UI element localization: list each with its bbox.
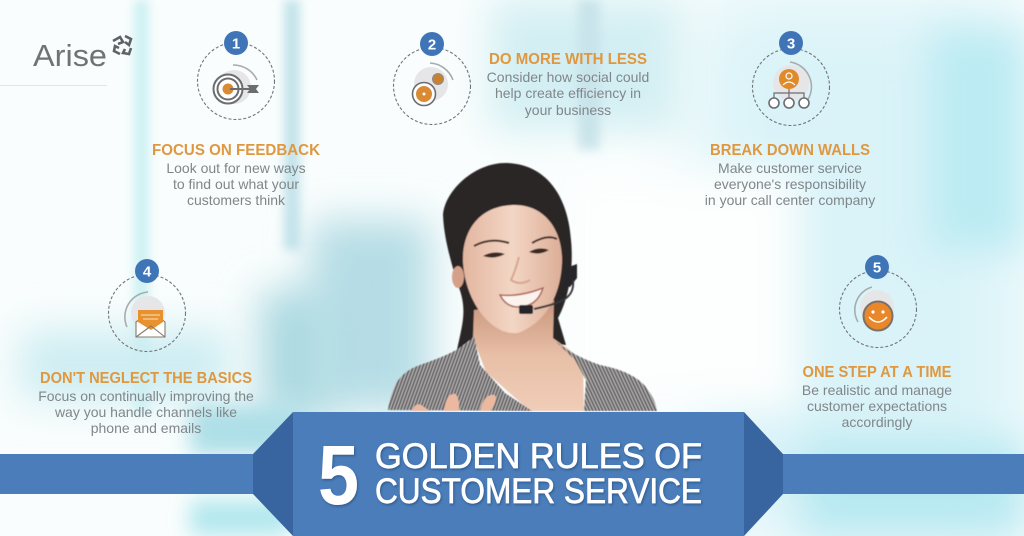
number badge 5	[865, 255, 889, 279]
number badge 1: 1	[232, 36, 240, 52]
icon: open envelope	[108, 274, 186, 352]
rule 2: do more with less	[394, 32, 649, 124]
body text: to find out what your	[173, 176, 299, 192]
number badge 3: 3	[787, 36, 795, 52]
title text: CUSTOMER SERVICE	[375, 472, 702, 511]
eyes	[483, 248, 549, 258]
number badge 5: 5	[873, 260, 881, 276]
body text: accordingly	[842, 414, 912, 430]
body text: way you handle channels like	[54, 404, 237, 420]
title text	[375, 437, 702, 511]
number badge 1	[224, 31, 248, 55]
rule 4: don't neglect the basics	[38, 259, 254, 436]
photo: woman with headset	[388, 163, 657, 411]
body text: customer expectations	[807, 398, 947, 414]
rule 1: focus on feedback	[152, 31, 321, 208]
number badge 2: 2	[428, 36, 436, 54]
icon: org chart	[752, 48, 830, 126]
rule 5: one step at a time	[802, 255, 952, 430]
ear	[452, 266, 464, 288]
body text: everyone's responsibility	[714, 176, 866, 192]
heading: BREAK DOWN WALLS	[710, 142, 870, 159]
shirt left	[388, 336, 532, 411]
smile	[500, 288, 543, 307]
heading: ONE STEP AT A TIME	[802, 364, 952, 381]
logo: Arise: Arise	[33, 38, 107, 73]
number badge 4: 4	[143, 264, 152, 280]
heading: DON'T NEGLECT THE BASICS	[40, 370, 252, 387]
title number: 5	[318, 428, 359, 522]
body text: customers think	[187, 192, 286, 208]
title banner	[0, 412, 1024, 536]
body text: Focus on continually improving the	[38, 388, 254, 404]
number badge 3	[779, 31, 803, 55]
title text: GOLDEN RULES OF	[375, 437, 702, 476]
headset	[563, 264, 577, 287]
number badge 2	[420, 32, 444, 56]
icon: target with arrow	[198, 42, 274, 120]
eyebrows	[474, 237, 557, 246]
nose shadow	[511, 257, 530, 283]
hair back	[443, 163, 572, 350]
icon: smiley	[840, 270, 916, 348]
icon: logo swirl	[113, 36, 131, 54]
number badge 4	[135, 259, 159, 283]
neck and chest	[473, 300, 584, 411]
heading: DO MORE WITH LESS	[489, 51, 647, 68]
body text: in your call center company	[705, 192, 875, 208]
body text: Look out for new ways	[166, 160, 306, 176]
body text: Be realistic and manage	[802, 382, 952, 398]
rule 3: break down walls	[705, 31, 875, 208]
shirt right	[552, 338, 657, 411]
body text: help create efficiency in	[495, 85, 641, 101]
body text: phone and emails	[91, 420, 201, 436]
body text: your business	[525, 102, 611, 118]
icon: gears	[394, 48, 470, 124]
body text: Consider how social could	[487, 69, 649, 85]
logo: Arise	[0, 36, 131, 86]
heading: FOCUS ON FEEDBACK	[152, 142, 321, 159]
body text: Make customer service	[718, 160, 862, 176]
face	[463, 205, 562, 333]
hands	[412, 394, 496, 411]
